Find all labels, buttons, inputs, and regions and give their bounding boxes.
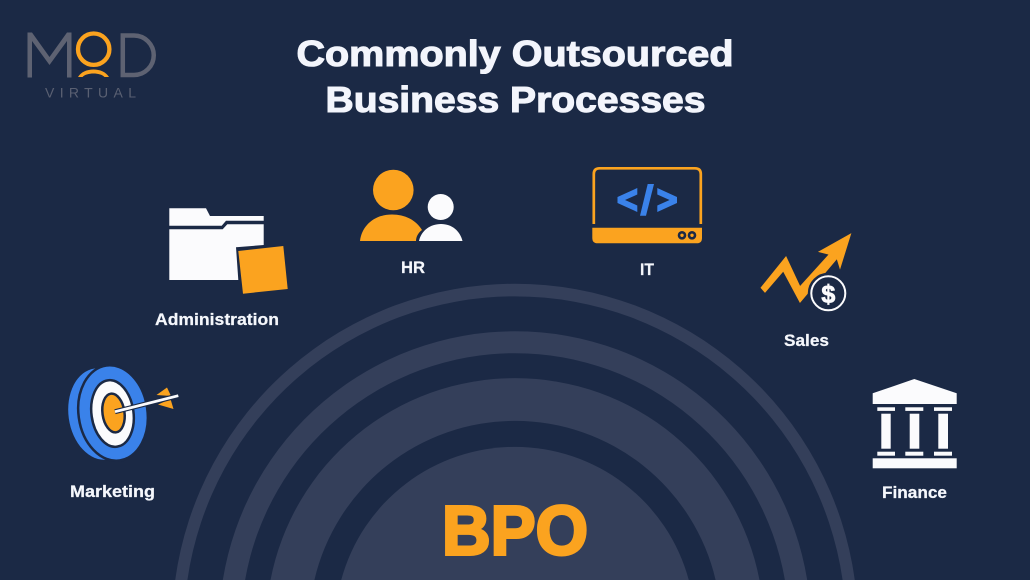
BPO center label: BPO (442, 492, 588, 570)
item: Marketing (62, 361, 178, 501)
icon: code monitor (592, 168, 702, 243)
item: Finance (873, 379, 957, 502)
icon: bank building (873, 379, 957, 468)
label: Finance: Finance (882, 483, 947, 502)
label: Sales: Sales (784, 331, 829, 350)
item: Administration (155, 208, 288, 329)
icon: people (360, 170, 462, 241)
label: IT: IT (640, 260, 655, 279)
icon: folder with note (169, 208, 288, 294)
concentric arcs (175, 284, 855, 580)
item: HR (360, 170, 462, 277)
label: Marketing: Marketing (70, 482, 155, 501)
logo: MOD Virtual (28, 32, 154, 100)
title: Business Processes (326, 79, 706, 120)
item: Sales (761, 234, 851, 350)
title (296, 33, 734, 120)
item: IT (592, 168, 702, 279)
label: Administration: Administration (155, 310, 279, 329)
label: HR: HR (401, 258, 425, 277)
logo: MOD Virtual: VIRTUAL (45, 84, 136, 100)
icon: rising arrow with dollar coin: $ (821, 280, 835, 308)
icon: target with arrow (62, 361, 178, 465)
title: Commonly Outsourced (296, 33, 734, 74)
